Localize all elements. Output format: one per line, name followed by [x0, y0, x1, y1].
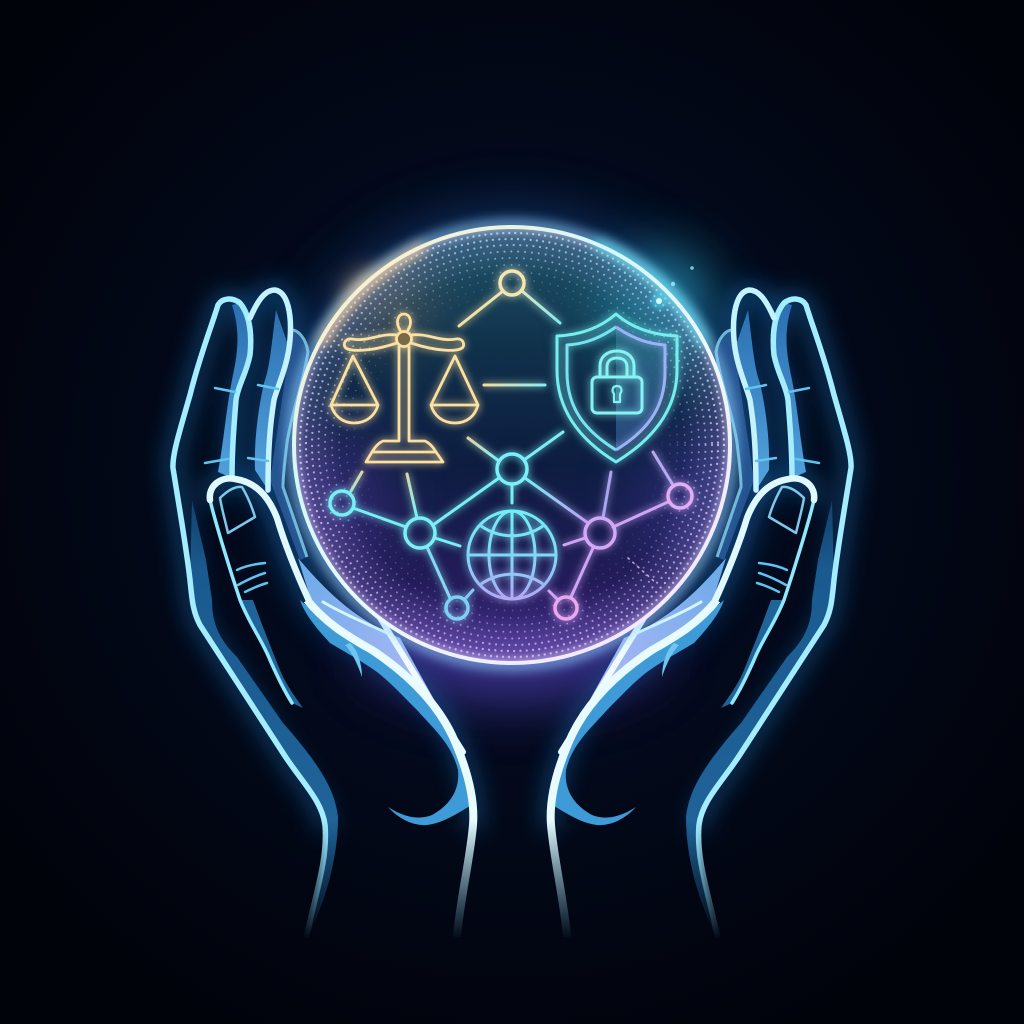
- outer hand outline: [173, 299, 325, 935]
- purple side tint: [296, 259, 728, 572]
- scale top ring and pivot: [396, 314, 412, 346]
- thumbnail: [220, 487, 255, 533]
- sphere body: [294, 227, 730, 663]
- thumb inner line: [210, 500, 292, 703]
- icon: globe: [468, 511, 556, 599]
- violet connector lines: [525, 452, 673, 600]
- cyan connector lines: [351, 432, 563, 599]
- knuckle creases: [205, 385, 278, 592]
- shield outlines: [557, 314, 677, 462]
- right scale pan: [431, 356, 478, 423]
- scale beam: [344, 335, 464, 350]
- blue finger and wrist bands: [190, 303, 472, 935]
- thumb tip outline: [210, 478, 310, 603]
- icon: shield with padlock: [557, 314, 677, 462]
- ambient glow around sphere: [280, 213, 744, 700]
- sparkles: [651, 266, 694, 309]
- teal highlight, upper right: [595, 243, 705, 345]
- palm beneath sphere: [298, 558, 463, 752]
- dot texture: [300, 233, 724, 657]
- upper connector lines: [459, 291, 560, 461]
- network connectors: [351, 291, 673, 600]
- left scale pan: [331, 356, 378, 423]
- scale column and base: [366, 347, 443, 462]
- second finger outline: [250, 290, 290, 490]
- hand outer glow: [173, 290, 473, 825]
- icon: scales of justice: [331, 314, 478, 462]
- right hand, mirrored: [551, 290, 851, 937]
- sparkle trail, lower right of sphere: [628, 558, 655, 582]
- palm crease lines: [323, 602, 463, 752]
- warm highlight, upper left: [322, 246, 425, 345]
- sphere rim shading: [294, 227, 730, 663]
- padlock: [592, 351, 642, 413]
- left hand: [173, 290, 473, 937]
- sphere rim: [294, 227, 730, 663]
- network nodes: [330, 271, 692, 619]
- illustration: hands cradling a digital sphere: [74, 32, 951, 938]
- thumb outer line: [307, 600, 473, 937]
- glass sphere: [250, 225, 774, 665]
- third finger, behind: [270, 330, 308, 560]
- shield right half tint: [616, 327, 665, 450]
- sphere outer halo: [292, 225, 732, 665]
